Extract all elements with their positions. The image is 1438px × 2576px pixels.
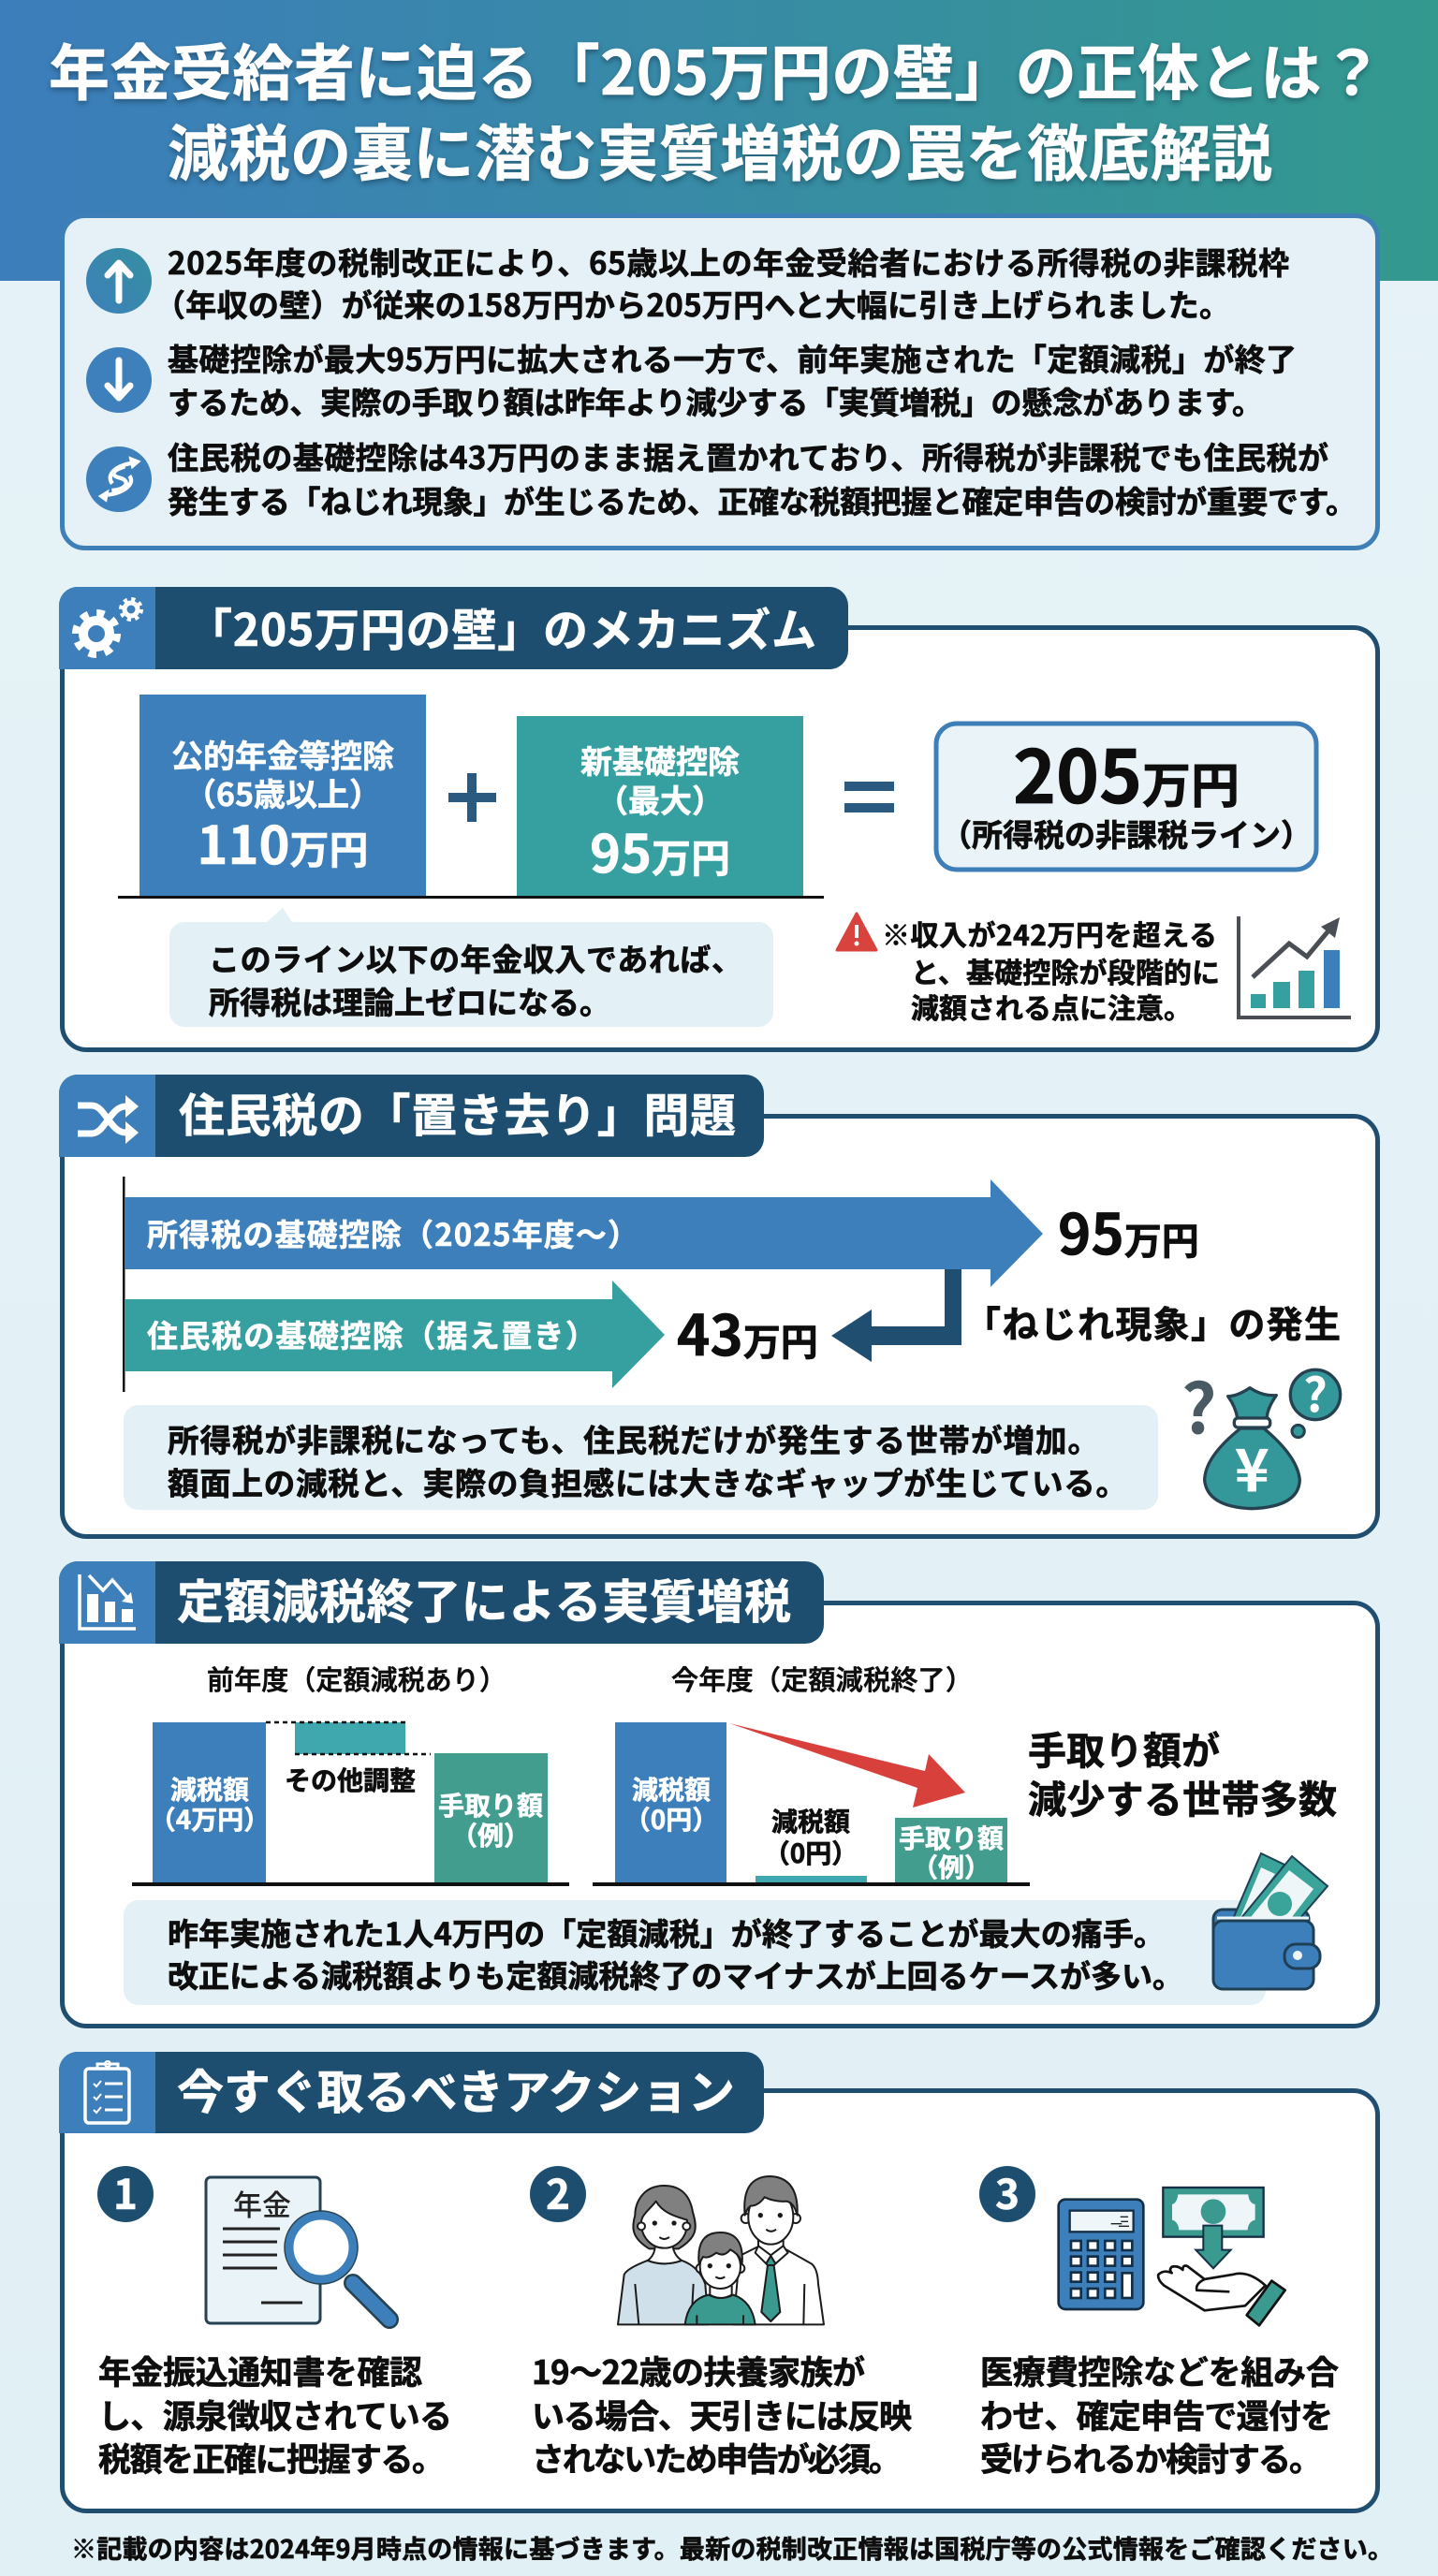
title: 年金受給者に迫る「205万円の壁」の正体とは？ bbox=[49, 24, 1383, 112]
bar: basic deduction: （最大） bbox=[596, 776, 724, 822]
icon: money bag with question marks: ? bbox=[1181, 1355, 1217, 1455]
arrow: twist bbox=[831, 1269, 961, 1362]
plus sign bbox=[448, 773, 496, 822]
summary point 2 bbox=[168, 335, 1297, 423]
step 1 text: 年金振込通知書を確認 bbox=[98, 2347, 422, 2394]
result box: 205万円: （所得税の非課税ライン） bbox=[941, 811, 1312, 856]
icon: down arrow bbox=[86, 347, 152, 413]
footer note: ※記載の内容は2024年9月時点の情報に基づきます。最新の税制改正情報は国税庁等の公式情報をご確認ください。 bbox=[71, 2529, 1393, 2566]
panel: resident tax bbox=[59, 1075, 1378, 1537]
icon: pension notice under magnifier: 年金 bbox=[233, 2182, 291, 2224]
callout: resident tax gap: 額面上の減税と、実際の負担感には大きなギャップが生じている。 bbox=[168, 1458, 1127, 1504]
callout: resident tax gap: 所得税が非課税になっても、住民税だけが発生する世帯が増加。 bbox=[168, 1415, 1099, 1461]
axis line bbox=[123, 1177, 125, 1392]
chart: this year: 減税額 bbox=[771, 1802, 850, 1839]
number 3 bbox=[979, 2161, 1035, 2222]
section heading: real tax increase bbox=[59, 1561, 824, 1644]
step 2 text: されないため申告が必須。 bbox=[532, 2434, 902, 2481]
panel: summary bbox=[62, 215, 1378, 549]
icon: gears bbox=[76, 599, 141, 654]
icon: wallet with banknotes bbox=[1213, 1853, 1328, 1989]
arrow: resident tax deduction: 住民税の基礎控除（据え置き） bbox=[147, 1311, 596, 1356]
label: twist phenomenon: 「ねじれ現象」の発生 bbox=[964, 1296, 1341, 1349]
step 2 bbox=[530, 2161, 912, 2481]
summary point 1 bbox=[154, 239, 1289, 326]
title bbox=[49, 24, 1383, 193]
icon: family bbox=[618, 2176, 824, 2324]
result box: 205万円 bbox=[936, 720, 1316, 870]
bar: basic deduction: 95万円 bbox=[590, 812, 730, 888]
step 1 text: し、源泉徴収されている bbox=[98, 2391, 452, 2438]
warning note: と、基礎控除が段階的に bbox=[911, 950, 1220, 991]
step 3 bbox=[979, 2161, 1339, 2481]
number 2: 2 bbox=[546, 2161, 570, 2221]
icon: warning bbox=[837, 914, 876, 950]
chart: previous year: （例） bbox=[451, 1816, 530, 1853]
step 3 text bbox=[980, 2347, 1339, 2481]
warning note: 減額される点に注意。 bbox=[911, 986, 1192, 1027]
icon: falling chart bbox=[80, 1574, 136, 1629]
chart: previous year bbox=[132, 1659, 569, 1886]
number 2 bbox=[530, 2161, 586, 2222]
note: take-home pay falls: 手取り額が bbox=[1028, 1720, 1220, 1776]
callout: zero income tax: 所得税は理論上ゼロになる。 bbox=[209, 978, 610, 1023]
icon: pension notice under magnifier bbox=[206, 2177, 389, 2323]
chart: this year: （0円） bbox=[764, 1834, 858, 1871]
number 1 bbox=[97, 2161, 154, 2222]
step 2 text: 19～22歳の扶養家族が bbox=[532, 2347, 865, 2394]
callout: flat-rate end: 昨年実施された1人4万円の「定額減税」が終了することが最大の痛手。 bbox=[168, 1910, 1165, 1954]
summary point 3 bbox=[168, 433, 1357, 522]
chart: previous year: 減税額 bbox=[170, 1770, 249, 1808]
step 1 bbox=[97, 2161, 452, 2481]
summary point 2: 基礎控除が最大95万円に拡大される一方で、前年実施された「定額減税」が終了 bbox=[168, 335, 1297, 380]
chart: this year: 減税額 bbox=[632, 1770, 711, 1808]
note: take-home pay falls bbox=[1028, 1720, 1337, 1824]
bar: pension deduction: （65歳以上） bbox=[184, 769, 381, 815]
value: 43万円: 43万円 bbox=[677, 1291, 818, 1372]
icon: calculator bbox=[1059, 2200, 1143, 2309]
section heading: actions bbox=[59, 2052, 764, 2133]
step 2 text: いる場合、天引きには反映 bbox=[532, 2391, 912, 2438]
panel: flat-rate tax cut ended bbox=[59, 1561, 1378, 2026]
warning note bbox=[882, 913, 1220, 1027]
bar: basic deduction bbox=[517, 716, 803, 897]
step 3 text: わせ、確定申告で還付を bbox=[980, 2391, 1333, 2438]
chart: this year: （例） bbox=[912, 1848, 990, 1885]
chart: previous year: （4万円） bbox=[150, 1800, 270, 1837]
bar: pension deduction: 110万円 bbox=[197, 804, 369, 880]
icon: money bag with question marks: ¥ bbox=[1235, 1424, 1269, 1509]
bar: pension deduction: 公的年金等控除 bbox=[171, 731, 394, 777]
number 1: 1 bbox=[113, 2161, 138, 2221]
warning note: ※収入が242万円を超える bbox=[882, 913, 1217, 954]
panel: mechanism bbox=[59, 587, 1378, 1050]
summary point 2: するため、実際の手取り額は昨年より減少する「実質増税」の懸念があります。 bbox=[168, 378, 1263, 423]
chart: previous year: 前年度（定額減税あり） bbox=[207, 1659, 506, 1698]
bar: pension deduction bbox=[139, 695, 426, 897]
icon: twist arrows bbox=[86, 446, 152, 512]
summary point 1: 2025年度の税制改正により、65歳以上の年金受給者における所得税の非課税枠 bbox=[168, 239, 1289, 284]
value: 95万円: 95万円 bbox=[1058, 1190, 1199, 1271]
result box: 205万円: 205万円 bbox=[1013, 720, 1240, 825]
icon: money bag with question marks: ? bbox=[1303, 1358, 1328, 1426]
icon: cash into hand bbox=[1158, 2188, 1285, 2325]
chart: this year: 手取り額 bbox=[899, 1819, 1004, 1856]
callout: resident tax gap bbox=[124, 1405, 1158, 1510]
baseline bbox=[118, 896, 824, 899]
arrow: income tax deduction bbox=[125, 1179, 1043, 1287]
title: 減税の裏に潜む実質増税の罠を徹底解説 bbox=[168, 105, 1272, 193]
icon: clipboard bbox=[85, 2061, 129, 2123]
section heading: resident tax bbox=[59, 1075, 764, 1157]
step 3 text: 受けられるか検討する。 bbox=[980, 2434, 1322, 2481]
icon: shuffle bbox=[78, 1095, 139, 1144]
chart: this year: 今年度（定額減税終了） bbox=[671, 1659, 973, 1698]
step 1 text: 税額を正確に把握する。 bbox=[98, 2434, 445, 2481]
icon: rising chart bbox=[1239, 916, 1351, 1017]
section heading: real tax increase: 定額減税終了による実質増税 bbox=[177, 1565, 791, 1632]
summary point 3: 住民税の基礎控除は43万円のまま据え置かれており、所得税が非課税でも住民税が bbox=[168, 433, 1328, 478]
arrow: resident tax deduction bbox=[125, 1281, 665, 1388]
chart: this year bbox=[593, 1659, 1030, 1886]
step 3 text: 医療費控除などを組み合 bbox=[980, 2347, 1339, 2394]
section heading: mechanism bbox=[59, 587, 848, 669]
callout: zero income tax bbox=[169, 908, 773, 1027]
arrow: red decline bbox=[729, 1723, 965, 1808]
icon: up arrow bbox=[86, 248, 152, 314]
note: take-home pay falls: 減少する世帯多数 bbox=[1028, 1768, 1337, 1824]
callout: flat-rate end bbox=[124, 1900, 1266, 2005]
icon: money bag with question marks bbox=[1181, 1355, 1341, 1509]
bar: basic deduction: 新基礎控除 bbox=[580, 737, 740, 783]
chart: previous year: 手取り額 bbox=[438, 1786, 543, 1823]
step 2 text bbox=[532, 2347, 912, 2481]
chart: previous year: その他調整 bbox=[285, 1761, 416, 1798]
section heading: resident tax: 住民税の「置き去り」問題 bbox=[179, 1079, 736, 1146]
arrow: income tax deduction: 所得税の基礎控除（2025年度～） bbox=[147, 1210, 638, 1255]
summary point 3: 発生する「ねじれ現象」が生じるため、正確な税額把握と確定申告の検討が重要です。 bbox=[168, 477, 1357, 522]
callout: zero income tax: このライン以下の年金収入であれば、 bbox=[209, 935, 742, 980]
chart: this year: （0円） bbox=[624, 1800, 718, 1837]
number 3: 3 bbox=[995, 2161, 1020, 2221]
section heading: mechanism: 「205万円の壁」のメカニズム bbox=[187, 593, 816, 659]
panel: actions bbox=[59, 2052, 1378, 2510]
section heading: actions: 今すぐ取るべきアクション bbox=[177, 2056, 735, 2123]
summary point 1: （年収の壁）が従来の158万円から205万円へと大幅に引き上げられました。 bbox=[154, 281, 1230, 326]
equals sign bbox=[844, 786, 894, 808]
callout: flat-rate end: 改正による減税額よりも定額減税終了のマイナスが上回るケースが多い。 bbox=[168, 1952, 1183, 1997]
header band bbox=[0, 0, 1438, 281]
step 1 text bbox=[98, 2347, 452, 2481]
